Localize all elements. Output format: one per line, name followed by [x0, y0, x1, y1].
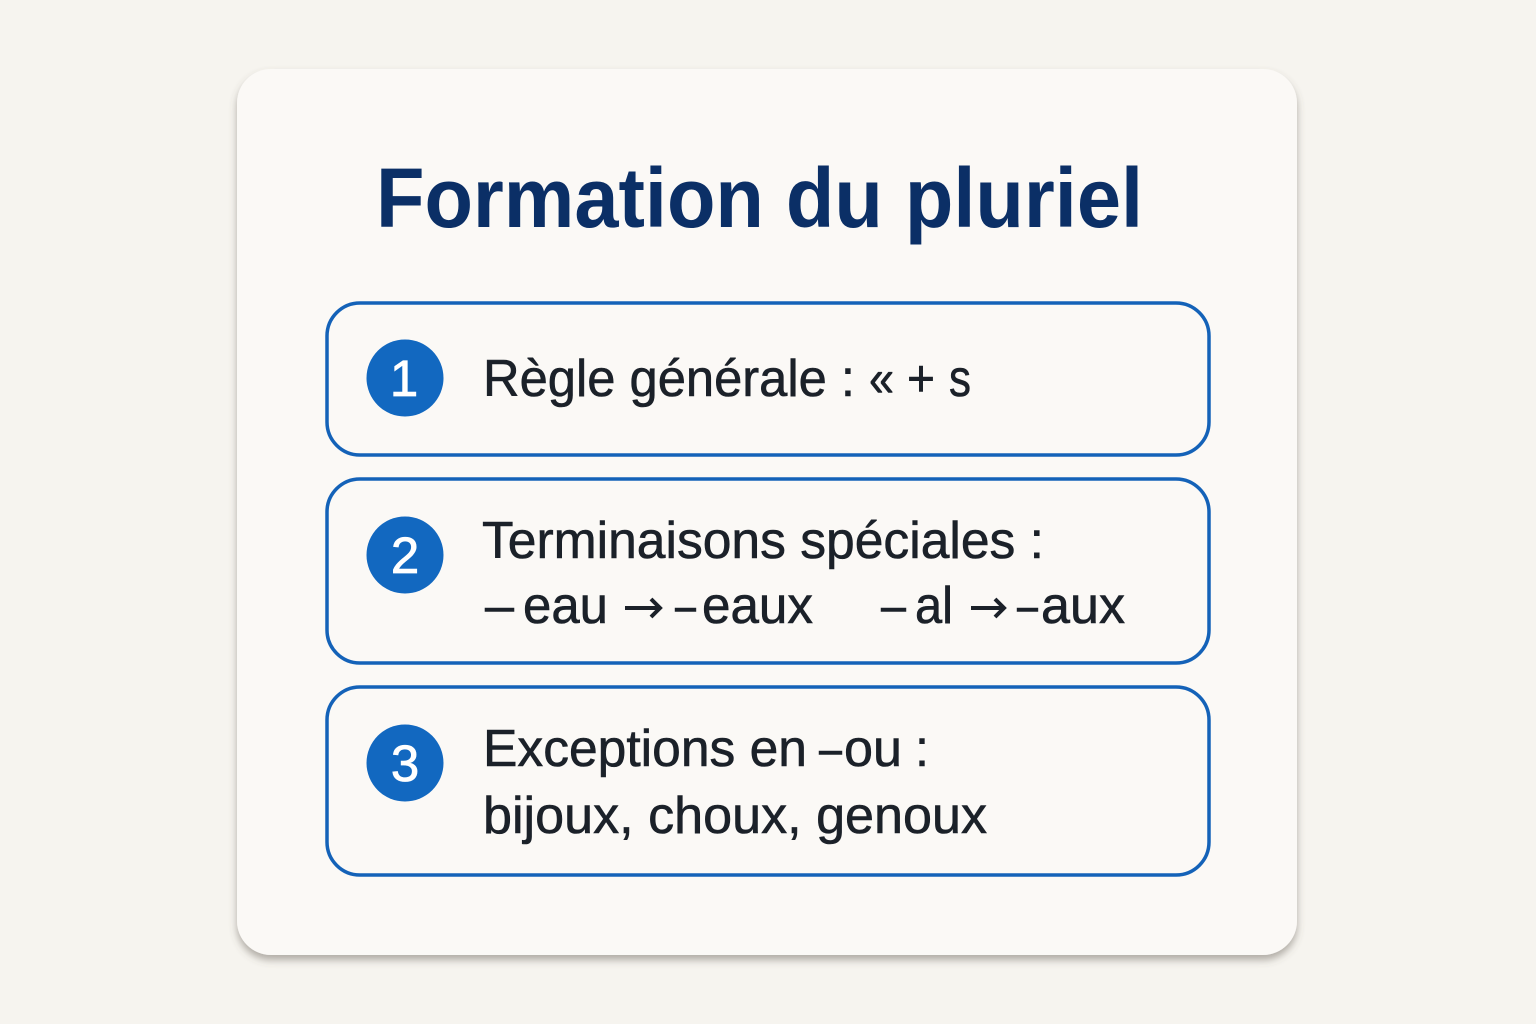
text: general rule: Règle générale :: [483, 350, 855, 408]
panel: special endings: [327, 479, 1209, 663]
text: eau rule: eaux: [702, 577, 813, 635]
text: general rule: «: [869, 350, 894, 408]
text: al rule: –: [1017, 577, 1038, 635]
icon: number 1: [366, 340, 444, 416]
icon: number 2: [366, 516, 444, 594]
text: exceptions heading: :: [915, 720, 929, 778]
text: eau rule: [485, 577, 813, 635]
text: exceptions heading: Exceptions en: [483, 720, 807, 778]
arrow: eau to eaux: [625, 599, 660, 617]
text: al rule: aux: [1041, 577, 1125, 635]
icon: number 2: 2: [391, 527, 419, 584]
panel: exceptions: [327, 687, 1209, 875]
panel: card: [237, 69, 1297, 955]
text: general rule: s: [949, 350, 971, 408]
panel: general rule: [327, 303, 1209, 455]
text: exceptions heading: ou: [844, 720, 902, 778]
text: eau rule: –: [675, 577, 696, 635]
icon: number 3: [366, 724, 444, 802]
text: general rule: +: [907, 350, 935, 408]
text: eau rule: eau: [523, 577, 608, 635]
text: exceptions heading: –: [819, 720, 842, 778]
icon: number 3: 3: [391, 735, 419, 792]
text: al rule: [881, 577, 1125, 635]
icon: number 1: 1: [390, 350, 418, 407]
title: Formation du pluriel: [376, 151, 1143, 245]
text: exception examples: bijoux, choux, genoux: [483, 787, 987, 845]
text: special endings heading: Terminaisons spéciales :: [482, 512, 1044, 570]
text: eau rule: –: [485, 577, 514, 635]
text: al rule: –: [881, 577, 906, 635]
arrow: al to aux: [971, 599, 1004, 617]
text: al rule: al: [915, 577, 953, 635]
